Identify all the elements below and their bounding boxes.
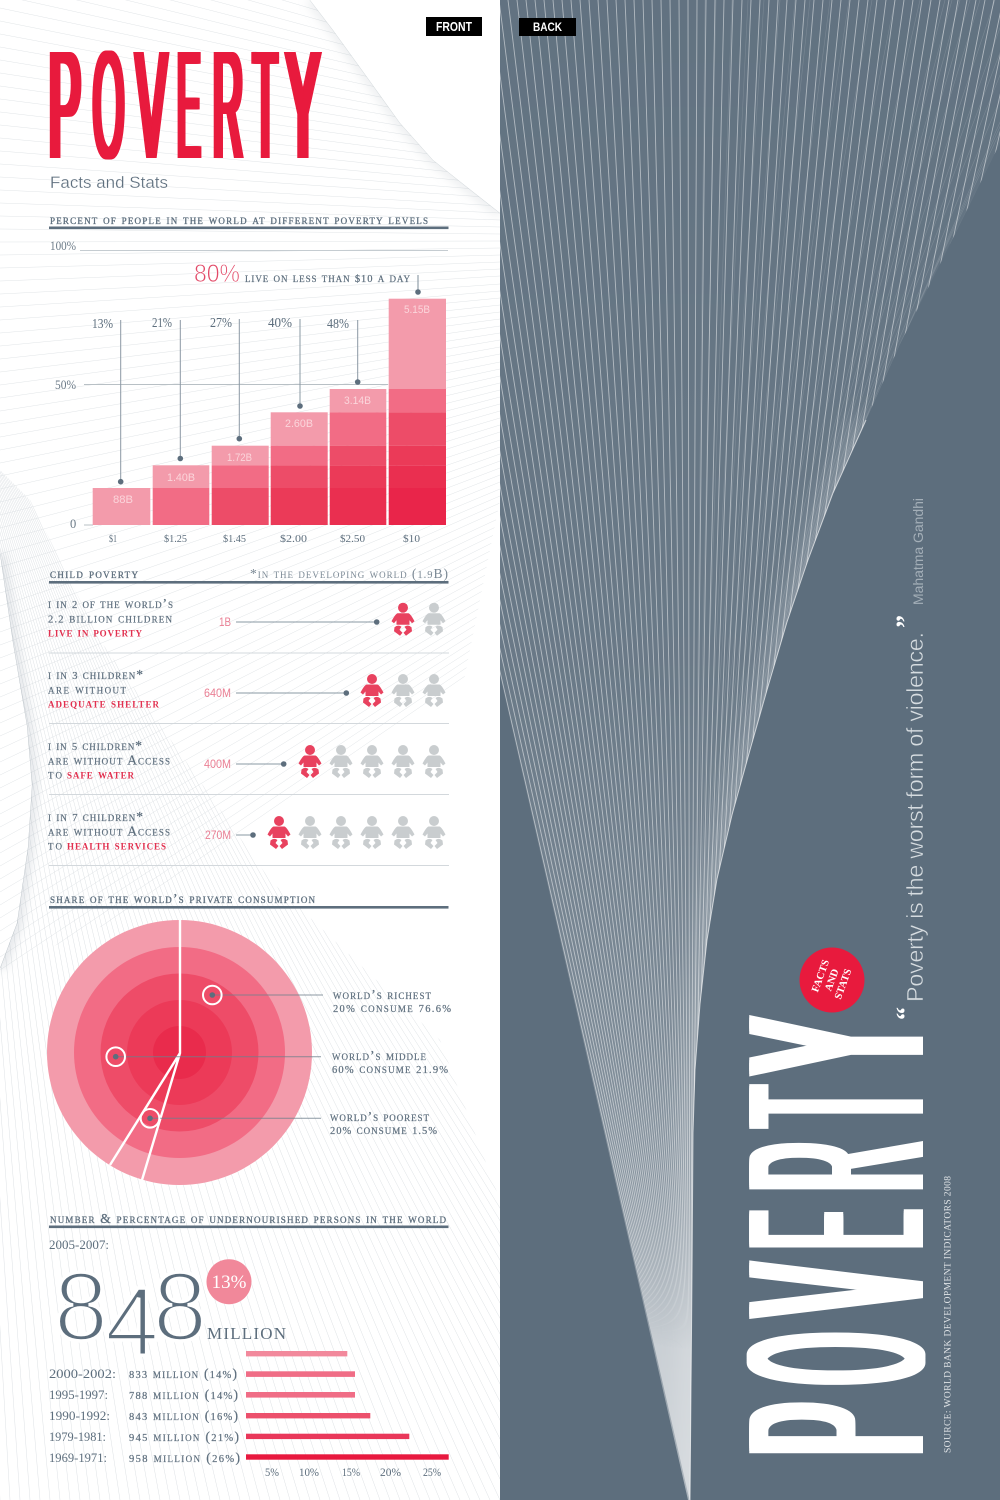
history axis: 10%	[299, 1467, 319, 1479]
row: 1 in 2 live in poverty: 2.2 billion children	[48, 610, 172, 626]
title: back POVERTY rotated: T	[694, 1087, 976, 1126]
percent labels	[92, 315, 349, 331]
history rows: 1990-1992:	[49, 1409, 110, 1423]
quote: ”	[891, 615, 920, 628]
panel: undernourished	[49, 1211, 449, 1479]
big number: 848 million: 4	[105, 1267, 159, 1376]
callout: 80 percent: live on less than $10 a day	[245, 270, 410, 285]
x axis labels: $2.00	[280, 533, 308, 545]
heading: child poverty: *in the developing world (1.9B)	[250, 566, 448, 581]
subtitle: Facts and Stats	[50, 173, 168, 192]
tab: front: FRONT	[436, 20, 472, 34]
history axis: 15%	[342, 1467, 360, 1479]
front panel upper line mesh	[0, 0, 500, 996]
title: front POVERTY: O	[93, 19, 124, 191]
bar chart: history	[246, 1351, 449, 1460]
history rows: 1979-1981:	[49, 1430, 106, 1444]
x axis labels: $10	[403, 533, 421, 545]
big number: 848 million: 8	[153, 1252, 207, 1361]
back panel background	[500, 0, 1000, 1500]
history rows: 1969-1971:	[49, 1451, 107, 1465]
history rows: 833 million (14%)	[129, 1366, 237, 1381]
history rows: 1995-1997:	[49, 1388, 108, 1402]
quote attribution: Mahatma Gandhi	[910, 498, 926, 605]
row: 1 in 7 without health services: i in 7 children*	[48, 809, 143, 824]
marker: richest: world’s richest	[333, 987, 432, 1002]
history rows: 788 million (14%)	[129, 1387, 238, 1402]
title: back POVERTY rotated	[694, 1015, 976, 1454]
badge: 13 percent: 13%	[212, 1272, 247, 1293]
title: front POVERTY: E	[177, 19, 201, 191]
bar: $1.25	[153, 465, 209, 525]
quote: Poverty is the worst form of violence.	[902, 632, 928, 1002]
percent labels: 48%	[327, 316, 349, 331]
bar: $1.45	[212, 446, 269, 525]
marker: poorest: 20% consume 1.5%	[330, 1122, 437, 1137]
badge: facts and stats	[800, 948, 864, 1012]
marker: middle: 60% consume 21.9%	[332, 1061, 448, 1076]
row: 1 in 3 without shelter: 640M	[204, 688, 231, 700]
title: front POVERTY: Y	[286, 19, 320, 191]
back panel mesh bright edge	[690, 420, 866, 1500]
badge: 13 percent	[206, 1259, 252, 1304]
title: back POVERTY rotated: O	[694, 1333, 976, 1383]
badge: facts and stats: AND	[823, 967, 842, 993]
row: 1 in 2 live in poverty: i in 2 of the world’s	[48, 596, 173, 611]
big number: 848 million: 8	[54, 1252, 108, 1361]
panel: child poverty	[48, 566, 449, 866]
title: back POVERTY rotated: E	[694, 1210, 976, 1248]
marker: middle	[106, 1047, 448, 1076]
quote	[891, 615, 928, 1020]
title: front POVERTY: V	[136, 19, 167, 191]
x axis labels	[109, 533, 421, 545]
heading: child poverty: child poverty	[50, 566, 138, 581]
title: back POVERTY rotated: P	[694, 1403, 976, 1454]
x axis labels: $1	[109, 533, 117, 545]
row: 1 in 3 without shelter: adequate shelter	[48, 696, 160, 710]
history axis: 20%	[380, 1467, 401, 1479]
marker: poorest	[141, 1109, 437, 1137]
marker: richest: 20% consume 76.6%	[333, 1000, 451, 1015]
row: 1 in 5 without safe water: are without Access	[48, 752, 170, 768]
history axis: 5%	[265, 1467, 279, 1479]
title: back POVERTY rotated: Y	[694, 1018, 976, 1073]
title: front POVERTY	[49, 19, 322, 191]
heading: private consumption: share of the world’s private consumption	[50, 891, 316, 906]
row: 1 in 7 without health services	[48, 809, 446, 852]
row: 1 in 5 without safe water	[48, 738, 446, 782]
history rows: 958 million (26%)	[129, 1450, 240, 1465]
bar: $2.00	[271, 412, 328, 525]
big number: 848 million: MILLION	[207, 1324, 286, 1343]
bar: $1: 88B	[113, 494, 133, 506]
title: back POVERTY rotated: R	[694, 1143, 976, 1191]
bar: $2.00: 2.60B	[285, 418, 313, 430]
row: 1 in 7 without health services: health services	[67, 838, 166, 852]
x axis labels: $2.50	[340, 533, 366, 545]
row: 1 in 5 without safe water: i in 5 children*	[48, 738, 142, 753]
bar: $1.25: 1.40B	[167, 472, 195, 484]
history rows: 945 million (21%)	[129, 1429, 239, 1444]
bar: $2.50	[330, 389, 386, 525]
row: 1 in 7 without health services: 270M	[205, 830, 231, 842]
chart axis: 0	[70, 517, 76, 531]
row: 1 in 7 without health services: to	[48, 838, 62, 852]
source note: SOURCE: WORLD BANK DEVELOPMENT INDICATORS 2008	[944, 1176, 954, 1453]
history axis: 25%	[423, 1467, 441, 1479]
history axis	[265, 1467, 441, 1479]
badge: facts and stats: FACTS	[810, 958, 832, 994]
chart axis	[50, 239, 448, 531]
row: 1 in 3 without shelter	[48, 667, 446, 710]
bar: $1.45: 1.72B	[227, 452, 252, 464]
callout: 80 percent: 80%	[194, 260, 240, 288]
heading: undernourished: number & percentage of undernourished persons in the world	[50, 1211, 446, 1226]
x axis labels: $1.45	[223, 533, 246, 545]
percent leaders	[118, 319, 361, 485]
marker: poorest: world’s poorest	[330, 1109, 430, 1124]
bar: $10: 5.15B	[404, 304, 430, 316]
history rows: 843 million (16%)	[129, 1408, 238, 1423]
quote: “	[891, 1007, 920, 1020]
label: 2005-2007: 2005-2007:	[49, 1238, 109, 1252]
percent labels: 13%	[92, 316, 113, 331]
heading: child poverty	[49, 566, 448, 584]
panel: poverty levels chart	[49, 212, 448, 545]
history rows	[49, 1366, 240, 1465]
row: 1 in 5 without safe water: safe water	[67, 766, 134, 782]
row: 1 in 5 without safe water: to	[48, 766, 62, 782]
percent labels: 40%	[268, 315, 292, 330]
percent labels: 21%	[152, 315, 172, 330]
row: 1 in 7 without health services: are without Access	[48, 824, 170, 838]
row: 1 in 2 live in poverty: 1B	[219, 617, 231, 629]
bar: $1	[93, 488, 150, 525]
tab: back	[519, 18, 576, 36]
chart axis: 50%	[55, 378, 76, 392]
marker: richest	[203, 986, 451, 1015]
row: 1 in 5 without safe water: 400M	[204, 759, 231, 771]
big number: 848 million	[54, 1252, 286, 1376]
history rows: 2000-2002:	[49, 1367, 116, 1381]
marker: middle: world’s middle	[332, 1048, 426, 1063]
panel: private consumption	[47, 891, 451, 1185]
badge: facts and stats: STATS	[833, 967, 854, 1001]
chart axis: 100%	[50, 239, 76, 253]
bar: $10	[389, 299, 446, 525]
front panel lower line mesh	[0, 471, 500, 1500]
tab: front	[426, 17, 482, 36]
row: 1 in 2 live in poverty	[48, 596, 446, 640]
concentric circle chart	[47, 918, 312, 1185]
title: front POVERTY: T	[253, 19, 277, 191]
title: front POVERTY: P	[49, 19, 81, 191]
percent labels: 27%	[210, 315, 232, 330]
row: 1 in 2 live in poverty: live in poverty	[48, 624, 142, 640]
bar: $2.50: 3.14B	[344, 395, 371, 407]
tab: back: BACK	[533, 20, 562, 34]
heading: poverty levels: percent of people in the world at different poverty levels	[50, 212, 428, 227]
row: 1 in 3 without shelter: are without	[48, 682, 126, 696]
back panel line mesh	[500, 0, 1000, 1500]
title: back POVERTY rotated: V	[694, 1265, 976, 1315]
title: front POVERTY: R	[213, 19, 243, 191]
callout: 80 percent	[194, 260, 421, 295]
row: 1 in 3 without shelter: i in 3 children*	[48, 667, 143, 682]
x axis labels: $1.25	[164, 533, 187, 545]
